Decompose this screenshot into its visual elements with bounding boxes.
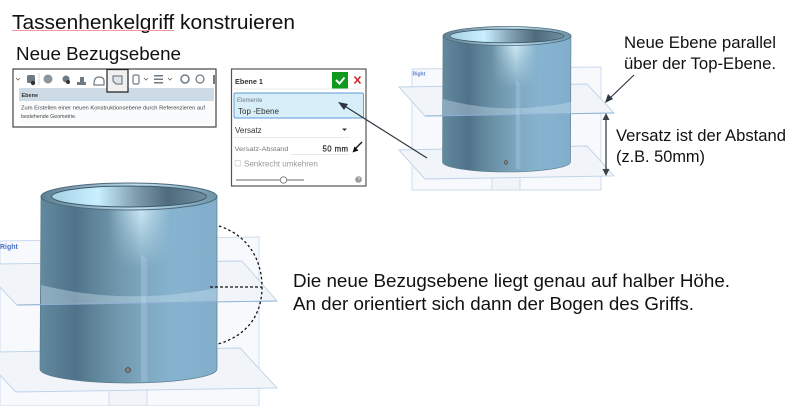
vertical strip <box>515 78 520 169</box>
icon: help: ? <box>357 178 360 184</box>
figure: small cup with planes <box>399 26 614 190</box>
cup body <box>442 26 571 172</box>
field: Versatz-Abstand: Versatz-Abstand <box>234 146 289 153</box>
mid-height band <box>443 99 571 116</box>
arrow: offset distance <box>602 113 610 176</box>
text: main explanation: Die neue Bezugsebene liegt genau auf halber Höhe. <box>293 270 730 291</box>
panel: toolbar screenshot <box>13 69 216 127</box>
vertical strip <box>141 253 147 382</box>
right plane <box>412 67 601 190</box>
tooltip: Zum Erstellen einer neuen Konstruktionsebene durch Referenzieren auf <box>21 106 206 112</box>
right plane: Right <box>0 244 19 251</box>
field: Elemente: Elemente <box>237 98 263 104</box>
field: Versatz: Versatz <box>235 126 262 135</box>
plane edge through cup <box>425 113 614 116</box>
dashed handle arc <box>218 226 262 344</box>
origin point <box>126 368 130 372</box>
text: offset note <box>616 127 786 166</box>
tooltip: bestehende Geometrie. <box>21 114 76 120</box>
plane edge through cup <box>17 301 277 305</box>
top plane <box>0 261 277 305</box>
field: Elemente <box>234 93 364 118</box>
confirm button <box>332 72 348 88</box>
arrow: to Elemente field <box>338 102 427 158</box>
right plane <box>0 237 259 406</box>
icon: direction arrow <box>352 142 362 152</box>
origin point <box>504 161 508 164</box>
slider <box>236 177 304 183</box>
title: Tassenhenkelgriff konstruieren <box>12 11 295 34</box>
top plane <box>399 84 614 116</box>
front plane below cup <box>109 360 147 406</box>
dashed centre line <box>210 286 262 288</box>
text: new plane note: über der Top-Ebene. <box>624 54 776 73</box>
checkbox: Senkrecht umkehren: Senkrecht umkehren <box>244 160 318 168</box>
tooltip <box>19 88 214 124</box>
arrow: to new plane <box>605 75 634 103</box>
text: new plane note: Neue Ebene parallel <box>624 33 776 52</box>
text: offset note: Versatz ist der Abstand <box>616 127 786 145</box>
mid-height band <box>41 285 217 305</box>
lower plane <box>0 348 277 392</box>
dialog title: Ebene 1 <box>235 77 263 86</box>
field: Versatz-Abstand <box>234 144 350 154</box>
tooltip: Ebene <box>22 93 38 99</box>
text: offset note: (z.B. 50mm) <box>616 148 705 166</box>
toolbar icons <box>16 73 215 85</box>
cup body <box>40 183 217 383</box>
panel: Ebene 1 dialog <box>232 69 366 186</box>
right plane: Right <box>412 72 426 78</box>
highlighted plane tool <box>107 70 128 92</box>
text: main explanation <box>293 270 730 314</box>
heading: Neue Bezugsebene: Neue Bezugsebene <box>16 43 181 64</box>
figure: large cup with planes <box>0 183 277 406</box>
text: new plane note <box>624 33 776 73</box>
field: Versatz-Abstand: 50 mm <box>322 144 348 154</box>
text: main explanation: An der orientiert sich dann der Bogen des Griffs. <box>293 293 694 314</box>
lower plane <box>399 146 614 179</box>
cancel icon <box>354 76 360 84</box>
field: Elemente: Top -Ebene <box>238 107 279 116</box>
